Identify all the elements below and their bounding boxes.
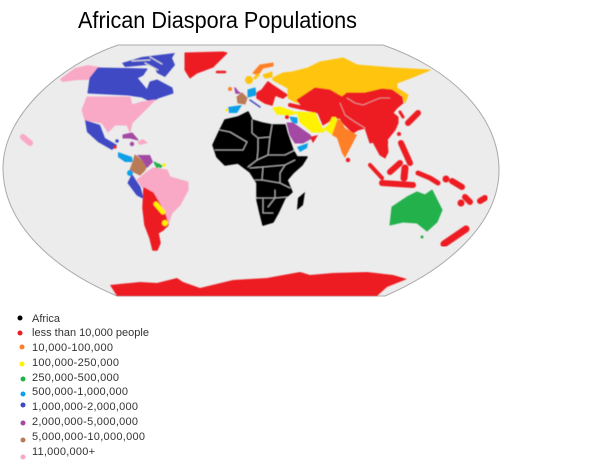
region: Southeast Asia and Oceania islands — [370, 132, 485, 244]
legend item: 11,000,000+: 11,000,000+ — [32, 446, 95, 458]
legend item: 100,000-250,000: 100,000-250,000 — [32, 357, 119, 369]
legend item: 10,000-100,000: 10,000-100,000 — [32, 342, 113, 354]
region: Antarctica — [110, 272, 407, 296]
region: Australia — [390, 190, 442, 238]
title: African Diaspora Populations — [78, 7, 357, 33]
legend item: less than 10,000 people: less than 10,000 people — [32, 327, 149, 339]
map background — [3, 45, 499, 296]
region: Asia — [273, 58, 430, 162]
legend item: 2,000,000-5,000,000: 2,000,000-5,000,000 — [32, 416, 138, 428]
legend item: Africa: Africa — [32, 313, 61, 325]
legend — [18, 313, 149, 460]
world map — [3, 45, 499, 296]
legend item: 500,000-1,000,000: 500,000-1,000,000 — [32, 386, 128, 398]
legend item: 250,000-500,000: 250,000-500,000 — [32, 372, 119, 384]
legend item: 5,000,000-10,000,000: 5,000,000-10,000,000 — [32, 431, 145, 443]
legend item: Africa — [18, 313, 61, 325]
region: Europe — [226, 63, 287, 113]
region: Africa — [213, 112, 307, 225]
region: South America — [127, 155, 188, 250]
region: Central America and Caribbean — [113, 133, 148, 162]
legend item: 1,000,000-2,000,000: 1,000,000-2,000,000 — [32, 401, 138, 413]
region: North America — [23, 52, 227, 150]
